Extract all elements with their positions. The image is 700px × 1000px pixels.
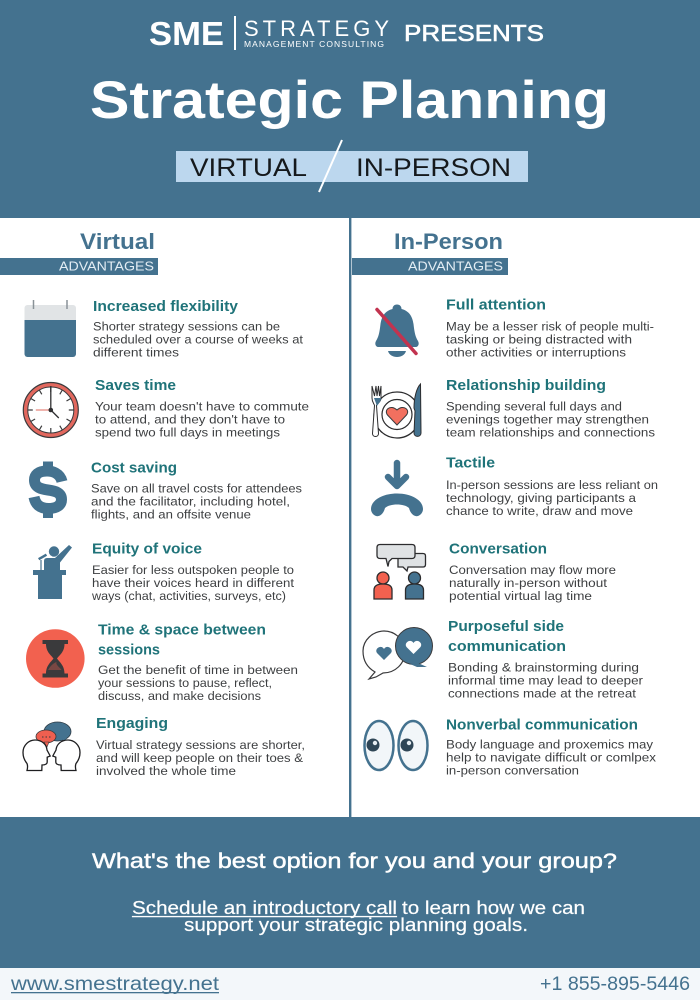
heading: in-person: In-Person bbox=[394, 229, 503, 254]
logo: SME Strategy: MANAGEMENT CONSULTING bbox=[244, 39, 384, 49]
item: full attention: other activities or interruptions bbox=[446, 346, 626, 360]
subtitle band: virtual / in-person bbox=[176, 140, 528, 192]
logo: SME Strategy bbox=[149, 15, 389, 52]
item: relationship building: team relationships and connections bbox=[446, 426, 655, 440]
item: engaging: involved the whole time bbox=[96, 764, 236, 778]
item: purposeful side communication: communication bbox=[448, 639, 566, 655]
icon: calendar bbox=[24, 300, 76, 357]
item: conversation: naturally in-person without bbox=[449, 576, 608, 590]
item: time and space between sessions: discuss, and make decisions bbox=[98, 689, 261, 703]
item: engaging bbox=[96, 716, 305, 778]
item: increased flexibility: Increased flexibility bbox=[93, 299, 239, 315]
item: purposeful side communication: Purposeful side bbox=[448, 619, 564, 635]
item: equity of voice bbox=[91, 541, 295, 603]
item: saves time bbox=[95, 378, 309, 440]
item: time and space between sessions: Get the benefit of time in between bbox=[98, 663, 298, 677]
item: increased flexibility: different times bbox=[93, 346, 179, 360]
item: tactile: chance to write, draw and move bbox=[446, 504, 633, 518]
panel: virtual bbox=[0, 229, 309, 778]
item: cost saving: flights, and an offsite venue bbox=[91, 508, 251, 522]
icon: heart speech bubbles bbox=[363, 628, 432, 679]
item: engaging: Engaging bbox=[96, 716, 168, 732]
icon: hourglass bbox=[26, 629, 85, 688]
item: time and space between sessions: Time & space between bbox=[98, 622, 266, 638]
contact strip bbox=[0, 968, 700, 1000]
item: purposeful side communication: informal time may lead to deeper bbox=[448, 674, 643, 688]
heading: virtual: Virtual bbox=[80, 229, 155, 254]
item: time and space between sessions: your sessions to pause, reflect, bbox=[98, 676, 272, 690]
item: engaging: Virtual strategy sessions are shorter, bbox=[96, 738, 305, 752]
center divider bbox=[349, 218, 351, 818]
panel: in-person bbox=[352, 229, 658, 777]
item: conversation: Conversation may flow more bbox=[449, 563, 616, 577]
question heading: What's the best option for you and your group? bbox=[92, 849, 617, 873]
phone: +1 855-895-5446 bbox=[540, 974, 690, 995]
item: full attention bbox=[446, 297, 654, 360]
logo: SME Strategy: STRATEGY bbox=[244, 16, 389, 41]
call to action footer bbox=[0, 817, 700, 968]
item: tactile: technology, giving participants a bbox=[446, 491, 636, 505]
icon: two heads talking bbox=[23, 722, 80, 770]
item: increased flexibility: Shorter strategy sessions can be bbox=[93, 320, 280, 334]
header banner bbox=[0, 0, 700, 218]
item: equity of voice: Easier for less outspoken people to bbox=[92, 563, 294, 577]
item: equity of voice: have their voices heard in different bbox=[92, 576, 295, 590]
icon: clock bbox=[23, 382, 78, 438]
call to action text: support your strategic planning goals. bbox=[184, 915, 528, 935]
item: relationship building: Spending several full days and bbox=[446, 400, 622, 414]
item: equity of voice: Equity of voice bbox=[92, 541, 202, 557]
subtitle band: virtual / in-person: IN-PERSON bbox=[356, 154, 511, 182]
item: time and space between sessions bbox=[98, 622, 298, 703]
item: cost saving bbox=[91, 460, 302, 522]
icon: arrow and handset bbox=[371, 463, 423, 516]
item: full attention: tasking or being distracted with bbox=[446, 333, 632, 347]
item: purposeful side communication bbox=[448, 619, 643, 701]
item: conversation bbox=[449, 541, 616, 603]
item: increased flexibility bbox=[93, 299, 304, 360]
item: equity of voice: ways (chat, activities, surveys, etc) bbox=[91, 589, 286, 603]
advantages bar: virtual bbox=[0, 258, 158, 275]
icon: eyes bbox=[364, 721, 428, 770]
call to action text: Schedule an introductory call bbox=[132, 898, 397, 918]
item: relationship building: Relationship building bbox=[446, 378, 606, 394]
item: saves time: Saves time bbox=[95, 378, 176, 394]
item: tactile: In-person sessions are less reliant on bbox=[446, 478, 658, 492]
logo: SME Strategy: SME bbox=[149, 15, 224, 52]
advantages bar: in-person bbox=[352, 258, 508, 275]
call to action text: to learn how we can bbox=[402, 898, 585, 918]
item: relationship building: evenings together may strengthen bbox=[446, 413, 649, 427]
subtitle band: virtual / in-person: VIRTUAL bbox=[190, 154, 307, 182]
item: full attention: Full attention bbox=[446, 297, 546, 313]
call to action text bbox=[132, 898, 585, 935]
icon: dollar sign bbox=[34, 462, 62, 518]
item: nonverbal communication: in-person conversation bbox=[446, 763, 579, 777]
website: www.smestrategy.net bbox=[10, 974, 220, 995]
item: nonverbal communication: Body language and proxemics may bbox=[446, 737, 654, 751]
item: time and space between sessions: sessions bbox=[98, 642, 160, 658]
advantages bar: virtual: ADVANTAGES bbox=[59, 258, 154, 274]
advantages bar: in-person: ADVANTAGES bbox=[408, 258, 503, 274]
item: conversation: potential virtual lag time bbox=[449, 589, 592, 603]
title: Strategic Planning bbox=[90, 71, 609, 130]
item: saves time: to attend, and they don't have to bbox=[95, 413, 285, 427]
presents label: PRESENTS bbox=[404, 20, 544, 46]
item: tactile: Tactile bbox=[446, 456, 495, 472]
item: full attention: May be a lesser risk of people multi- bbox=[446, 320, 654, 334]
item: purposeful side communication: connections made at the retreat bbox=[448, 687, 637, 701]
item: saves time: spend two full days in meetings bbox=[95, 426, 280, 440]
item: conversation: Conversation bbox=[449, 541, 547, 557]
item: cost saving: and the facilitator, including hotel, bbox=[91, 495, 290, 509]
item: relationship building bbox=[446, 378, 655, 440]
item: tactile bbox=[446, 456, 658, 518]
item: engaging: and will keep people on their toes & bbox=[96, 751, 304, 765]
item: saves time: Your team doesn't have to commute bbox=[95, 400, 309, 414]
icon: two people conversing bbox=[374, 544, 426, 599]
item: nonverbal communication bbox=[446, 717, 657, 777]
icon: speaker at podium bbox=[33, 545, 72, 599]
item: nonverbal communication: Nonverbal communication bbox=[446, 717, 638, 733]
item: cost saving: Save on all travel costs for attendees bbox=[91, 482, 302, 496]
item: increased flexibility: scheduled over a course of weeks at bbox=[93, 333, 304, 347]
icon: plate with heart bbox=[372, 384, 421, 438]
icon: muted bell bbox=[375, 304, 419, 357]
item: nonverbal communication: help to navigate difficult or comlpex bbox=[446, 750, 657, 764]
item: cost saving: Cost saving bbox=[91, 460, 177, 476]
item: purposeful side communication: Bonding & brainstorming during bbox=[448, 661, 639, 675]
